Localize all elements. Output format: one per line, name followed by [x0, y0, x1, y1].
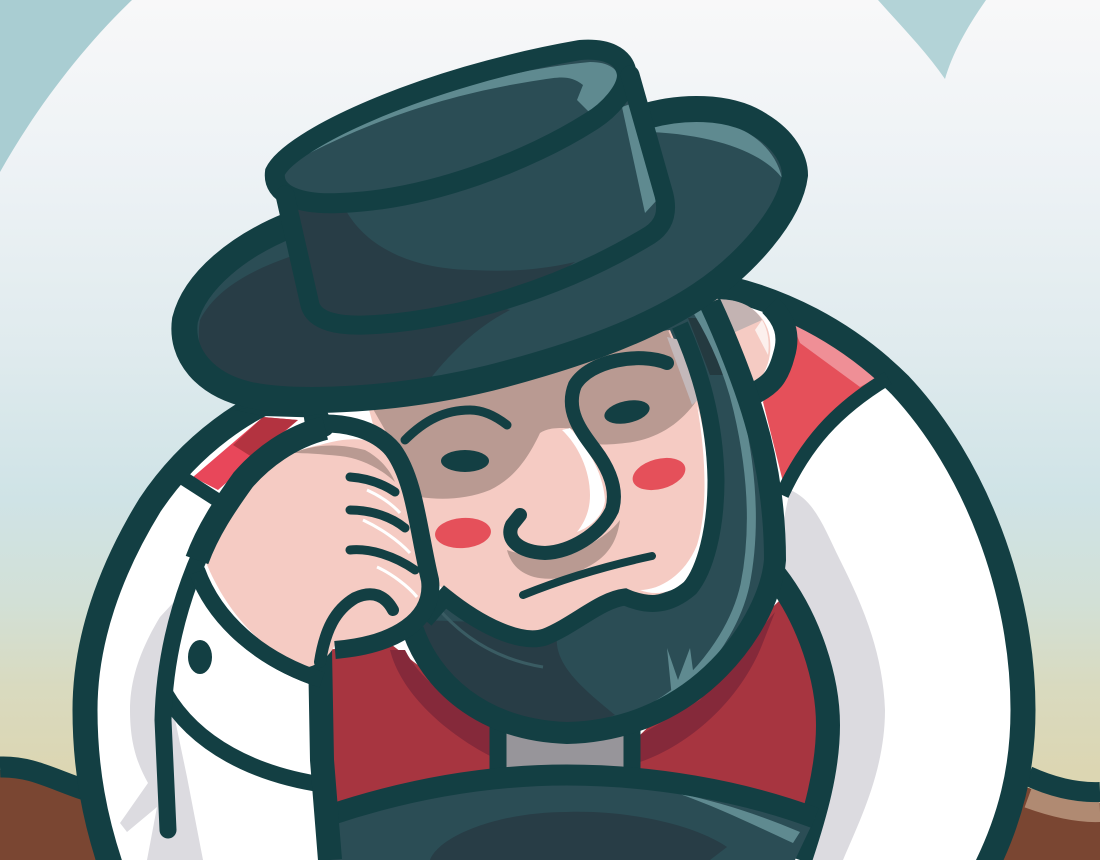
red vest lower — [320, 600, 830, 820]
cheeks — [434, 516, 492, 550]
hand — [197, 424, 430, 680]
shirt collar — [498, 725, 632, 778]
eyes — [441, 450, 489, 472]
crown shadow — [293, 205, 575, 325]
top-left corner shape — [0, 0, 132, 172]
eye shadow — [365, 330, 697, 499]
red panel upper right — [763, 318, 878, 490]
cuff and arm lines — [163, 428, 330, 860]
ear — [705, 299, 786, 393]
hat — [184, 50, 795, 400]
beard dark side — [415, 620, 615, 735]
beard tufts — [667, 648, 694, 698]
sleeve shadow — [120, 590, 203, 860]
mouth — [523, 556, 652, 595]
body — [85, 283, 1023, 860]
finger highlights — [363, 490, 417, 597]
cuff button — [188, 640, 212, 674]
top-right notch shape — [878, 0, 986, 79]
fingers — [350, 477, 415, 570]
crown highlights — [622, 103, 657, 213]
body outlines — [85, 283, 1023, 860]
ground — [0, 767, 1100, 860]
hat brim — [184, 109, 795, 400]
hat crown — [275, 50, 666, 325]
beard outline — [413, 303, 775, 733]
body shadow — [775, 490, 885, 860]
jaw line — [425, 325, 716, 639]
left eyebrow — [405, 410, 507, 440]
beard highlight strand — [657, 312, 751, 705]
face edge highlight — [640, 405, 708, 593]
face — [365, 325, 716, 640]
nose shadow — [507, 520, 620, 579]
red stripe upper left — [193, 417, 298, 490]
nose highlight — [562, 428, 605, 532]
thumb hook — [320, 594, 393, 662]
crown outlines — [275, 50, 627, 203]
hand outline — [305, 424, 430, 650]
beard — [413, 303, 775, 735]
hand top shadow — [293, 446, 395, 482]
nose line — [510, 358, 667, 553]
lower dark shape — [322, 775, 815, 860]
